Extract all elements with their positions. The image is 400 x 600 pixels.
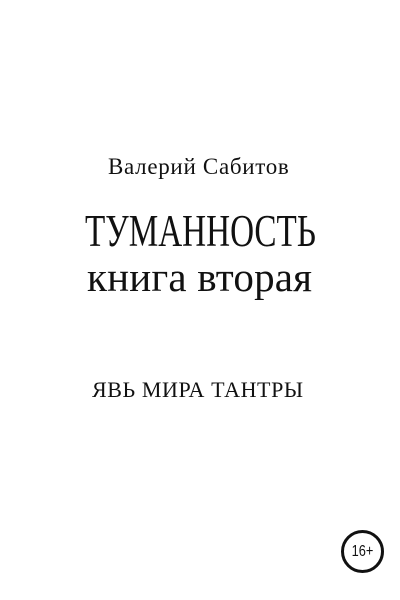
subtitle: книга вторая <box>87 254 312 300</box>
title: ТУМАННОСТЬ <box>85 206 316 256</box>
author name: Валерий Сабитов <box>108 154 289 179</box>
age rating text: 16+ <box>352 543 373 560</box>
series title: ЯВЬ МИРА ТАНТРЫ <box>92 377 304 402</box>
age rating badge <box>341 530 384 573</box>
